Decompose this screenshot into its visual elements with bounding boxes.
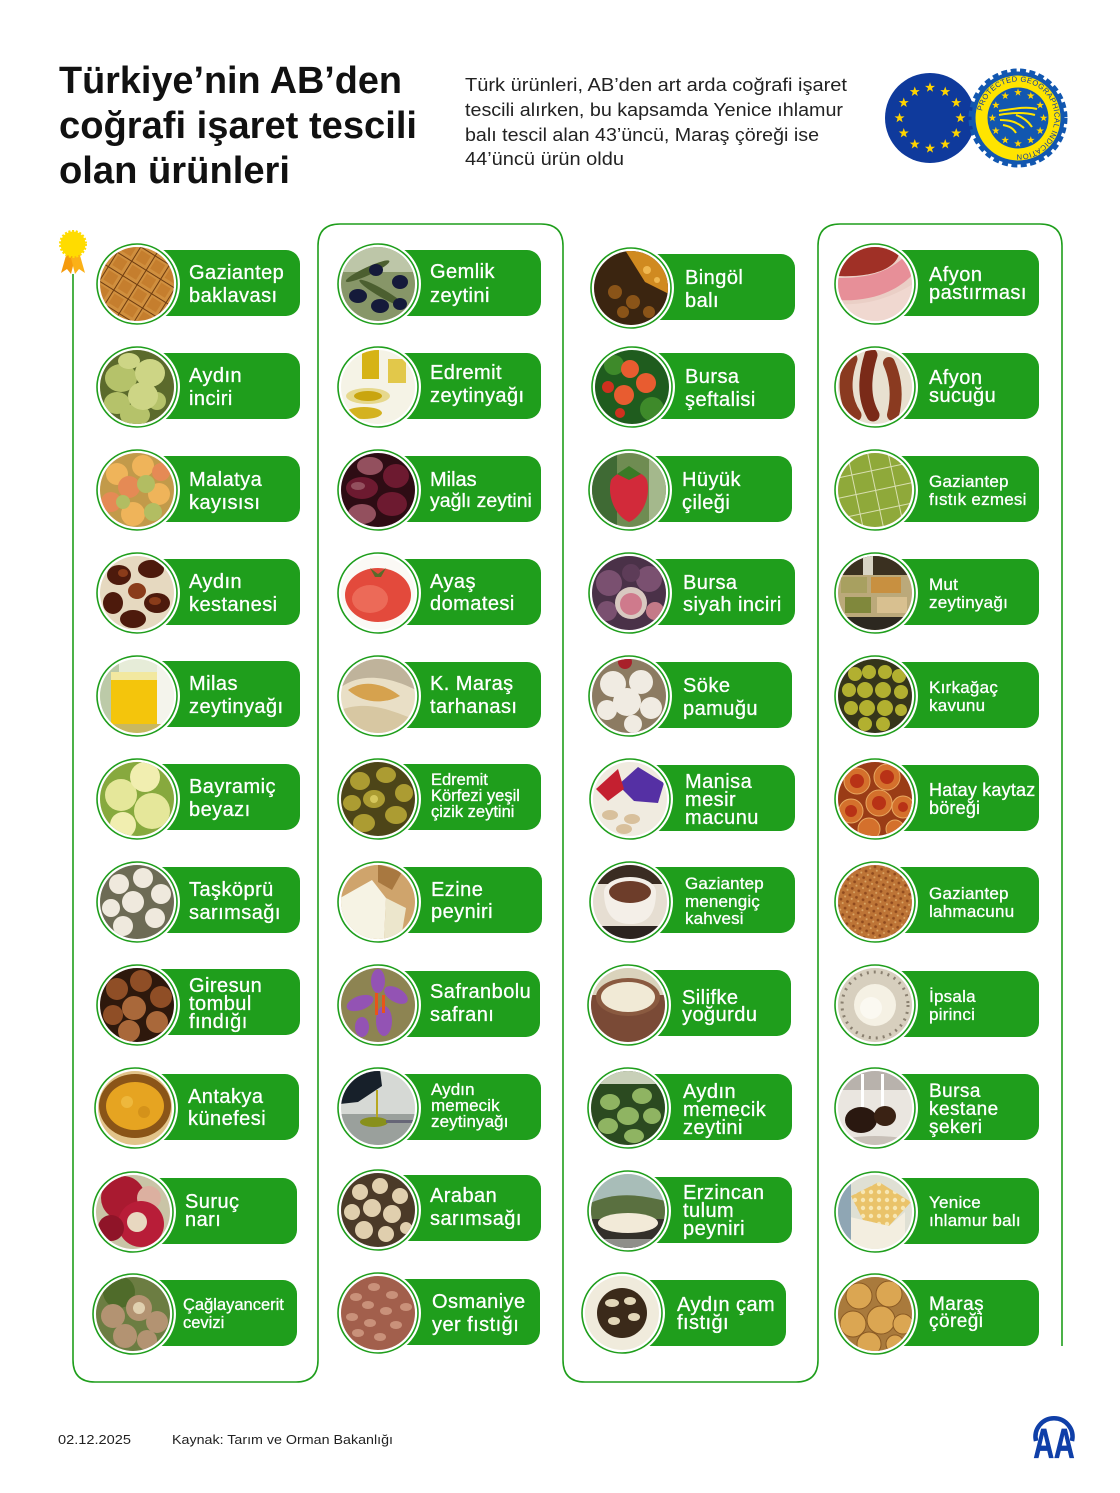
item: Erzincan tulum peyniri [585,1168,792,1254]
icon: protected geographical indication seal: PROTECTED GEOGRAPHICAL INDICATION [977,76,1060,160]
label: zeytini [430,285,490,307]
item: Antakya künefesi [92,1065,299,1151]
photo: pouring oil [340,1070,416,1146]
item: Aydın kestanesi [94,550,300,636]
item: K. Maraş tarhanası [335,653,541,739]
item: Aydın memecik zeytinyağı [335,1065,541,1151]
pill [378,250,541,316]
item: Milas yağlı zeytini [335,447,541,533]
label: Ezine [431,879,483,901]
pill [378,1074,541,1140]
photo: coffee cup [592,864,668,940]
label: yer fıstığı [432,1314,519,1336]
item: Aydın inciri [94,344,300,430]
label: memecik [683,1099,767,1121]
item: İpsala pirinci [832,962,1039,1048]
label: kahvesi [685,909,744,928]
label: safranı [430,1004,494,1026]
label: Bursa [683,572,738,594]
photo: peanuts [340,1275,416,1351]
photo: tarhana [340,658,416,734]
label: peyniri [431,901,493,923]
label: lahmacunu [929,902,1014,921]
pill [875,1178,1039,1244]
pill [629,559,795,625]
item: Bursa siyah inciri [586,550,795,636]
item: Edremit Körfezi yeşil çizik zeytini [335,756,541,842]
label: Aydın çam [677,1294,775,1316]
pill [875,971,1039,1037]
pill [875,867,1039,933]
pill [875,662,1039,728]
label: mesir [685,789,736,811]
label: menengiç [685,892,760,911]
label: Körfezi yeşil [431,787,520,805]
item: Gaziantep lahmacunu [832,859,1039,945]
label: Hatay kaytaz [929,780,1035,800]
label: Ayaş [430,571,476,593]
photo: candied chestnuts [837,1070,913,1148]
label: sarımsağı [430,1208,522,1230]
photo: tomato [340,555,416,631]
photo: pine nuts [584,1275,660,1351]
photo: saffron flowers [340,967,416,1043]
photo: yogurt bowl [590,967,666,1043]
item: Manisa mesir macunu [587,756,795,842]
item: Ezine peyniri [335,859,542,945]
label: yoğurdu [682,1004,757,1026]
label: Kırkağaç [929,678,998,697]
photo: baklava [99,246,175,322]
label: macunu [685,807,759,829]
label: cevizi [183,1314,224,1332]
photo: olive oil glass [99,658,175,734]
pill [378,1279,540,1345]
label: Hüyük [682,469,741,491]
photo: figs [99,349,175,426]
photo: strawberry [591,452,667,528]
item: Araban sarımsağı [335,1167,541,1253]
pill [135,1074,299,1140]
label: baklavası [189,285,278,307]
label: Söke [683,675,730,697]
photo: pistachio paste [837,452,913,528]
pill [632,353,795,419]
photo: garlic [99,864,175,940]
icon: AA logo [1034,1418,1074,1467]
item: Silifke yoğurdu [585,962,791,1048]
pill [628,970,791,1036]
pill [133,1280,297,1346]
label: Mut [929,575,958,594]
pill [628,1177,792,1243]
label: domatesi [430,593,515,615]
label: zeytinyağı [929,593,1008,612]
label: inciri [189,388,233,410]
footer date: 02.12.2025 [58,1432,131,1447]
label: sucuğu [929,385,996,407]
item: Aydın çam fıstığı [579,1270,786,1356]
label: şeftalisi [685,389,756,411]
label: Gaziantep [929,884,1009,903]
photo: olive oil dishes [340,349,416,425]
label: çöreği [929,1311,983,1332]
pill [378,867,542,933]
item: Milas zeytinyağı [94,653,300,739]
label: çileği [682,492,730,514]
label: Bursa [685,366,740,388]
label: Yenice [929,1193,981,1212]
label: Suruç [185,1191,240,1213]
pill [137,353,300,419]
photo: hazelnuts [99,967,175,1043]
photo: honeycomb bees [593,250,669,326]
item: Mut zeytinyağı [832,550,1039,636]
pill [875,353,1039,419]
item: Bursa şeftalisi [589,344,795,430]
label: böreği [929,798,980,818]
photo: kunefe [97,1070,173,1146]
intro text: tescili alırken, bu kapsamda Yenice ıhlamur [465,99,843,120]
photo: market stall [837,555,913,631]
intro text: Türk ürünleri, AB’den art arda coğrafi işaret [465,74,847,95]
item: Çağlayancerit cevizi [90,1271,297,1357]
item: Osmaniye yer fıstığı [335,1270,540,1356]
label: zeytini [683,1117,743,1139]
photo: melons [837,658,913,734]
label: Manisa [685,771,752,793]
label: pamuğu [683,698,758,720]
label: Araban [430,1185,497,1207]
label: Safranbolu [430,981,531,1003]
item: Gaziantep baklavası [94,241,300,327]
label: peyniri [683,1218,745,1240]
photo: black figs [591,555,667,631]
item: Yenice ıhlamur balı [832,1169,1039,1255]
label: zeytinyağı [430,385,525,407]
item: Afyon pastırması [832,241,1039,327]
label: Aydın [189,571,242,593]
pill [629,662,792,728]
label: kavunu [929,696,985,715]
item: Bursa kestane şekeri [832,1065,1039,1151]
label: Aydın [431,1080,475,1099]
pill [378,353,541,419]
label: Aydın [189,365,242,387]
label: yağlı zeytini [430,490,532,512]
pill [137,661,300,727]
pill [137,867,300,933]
pill [137,456,300,522]
photo: tulum cheese [590,1173,666,1249]
item: Aydın memecik zeytini [585,1065,792,1151]
pill [378,971,540,1037]
label: zeytinyağı [189,696,284,718]
label: kestanesi [189,594,278,616]
label: çizik zeytini [431,803,514,821]
label: Edremit [430,362,502,384]
photo: peach tree [594,349,670,425]
label: fıstık ezmesi [929,490,1027,509]
pill [378,662,541,728]
item: Gaziantep menengiç kahvesi [587,859,795,945]
label: tulum [683,1200,734,1222]
photo: pomegranate [95,1174,171,1250]
item: Söke pamuğu [586,653,792,739]
photo: garlic bulbs [340,1172,416,1248]
item: Afyon sucuğu [832,344,1039,430]
pill [378,456,541,522]
icon: EU flag circle [885,73,975,163]
photo: chestnuts [99,555,175,631]
label: memecik [431,1096,500,1115]
item: Malatya kayısısı [94,447,300,533]
photo: candies [592,761,668,837]
photo: apricots [99,452,175,528]
pill [630,867,795,933]
item: Safranbolu safranı [335,962,540,1048]
photo: pastrami [837,246,913,322]
label: narı [185,1209,221,1231]
label: Bayramiç [189,776,276,798]
title [59,60,417,192]
pill [875,250,1039,316]
pill [378,764,541,830]
pill [628,1074,792,1140]
icon: AA logo: AA [1034,1420,1074,1467]
label: zeytinyağı [431,1112,509,1131]
photo: dark red olives [340,452,416,528]
label: şekeri [929,1117,982,1138]
item: Gaziantep fıstık ezmesi [832,447,1039,533]
label: Afyon [929,367,982,389]
item: Hüyük çileği [586,447,792,533]
title: Türkiye’nin AB’den [59,60,402,102]
photo: pale apples [99,761,175,838]
label: Bursa [929,1081,981,1102]
pill [622,1280,786,1346]
pill [875,559,1039,625]
pill [137,559,300,625]
label: Edremit [431,771,488,789]
item: Bingöl balı [588,245,795,331]
pill [378,1175,541,1241]
footer source: Kaynak: Tarım ve Orman Bakanlığı [172,1432,393,1447]
label: Erzincan [683,1182,764,1204]
label: Silifke [682,987,738,1009]
label: kestane [929,1099,999,1120]
label: ıhlamur balı [929,1211,1021,1230]
label: Çağlayancerit [183,1296,284,1314]
label: Osmaniye [432,1291,526,1313]
label: Taşköprü [189,879,274,901]
intro text: balı tescil alan 43’üncü, Maraş çöreği ise [465,124,819,145]
label: Malatya [189,469,262,491]
pill [875,1280,1039,1346]
label: Antakya [188,1086,263,1108]
pill [378,559,541,625]
label: Milas [189,673,238,695]
label: Giresun [189,975,262,997]
label: Gemlik [430,261,495,283]
label: Milas [430,469,477,491]
pill [875,456,1039,522]
label: Gaziantep [929,472,1009,491]
photo: cotton [591,655,667,734]
item: Bayramiç beyazı [94,756,300,842]
pill [133,1178,297,1244]
item: Maraş çöreği [832,1271,1039,1357]
photo: walnuts [95,1276,171,1352]
photo: lahmacun [837,864,913,940]
label: sarımsağı [189,902,281,924]
label: künefesi [188,1108,266,1130]
pill [137,764,300,830]
photo: kaytaz pastries [837,761,914,840]
label: İpsala [929,987,976,1006]
item: Taşköprü sarımsağı [94,859,300,945]
photo: sausages [837,349,913,425]
photo: black olives [340,246,416,322]
item: Gemlik zeytini [335,241,541,327]
pill [137,250,300,316]
pill [875,765,1039,831]
label: Aydın [683,1081,736,1103]
pill [137,969,300,1035]
pill [630,765,795,831]
label: fıstığı [677,1312,729,1334]
item: Ayaş domatesi [335,550,541,636]
label: balı [685,290,719,312]
timeline frame line [73,224,1062,1382]
label: kayısısı [189,492,260,514]
label: Gaziantep [685,874,764,893]
label: siyah inciri [683,594,782,616]
item: Edremit zeytinyağı [335,344,541,430]
label: tarhanası [430,696,517,718]
item: Hatay kaytaz böreği [832,756,1039,842]
title: coğrafi işaret tescili [59,105,417,147]
intro text [465,74,847,169]
label: beyazı [189,799,251,821]
photo: rice on plate [837,967,913,1043]
label: Maraş [929,1294,984,1315]
photo: white cheese [340,864,416,940]
label: Gaziantep [189,262,284,284]
pill [631,254,795,320]
label: Bingöl [685,267,743,289]
item: Suruç narı [90,1169,297,1255]
pill [629,456,792,522]
intro text: 44’üncü ürün oldu [465,148,624,169]
photo: maras cookies [837,1276,913,1356]
title: olan ürünleri [59,150,290,192]
photo: green olives [340,761,416,837]
icon: medal [60,232,86,274]
item: Giresun tombul fındığı [94,962,300,1048]
pill [875,1074,1039,1140]
label: Afyon [929,264,982,286]
label: fındığı [189,1011,248,1033]
label: pirinci [929,1005,975,1024]
photo: linden honey comb [837,1174,913,1250]
item: Kırkağaç kavunu [832,653,1039,739]
label: pastırması [929,282,1027,304]
photo: green memecik olives [590,1070,666,1146]
label: K. Maraş [430,673,514,695]
label: tombul [189,993,252,1015]
